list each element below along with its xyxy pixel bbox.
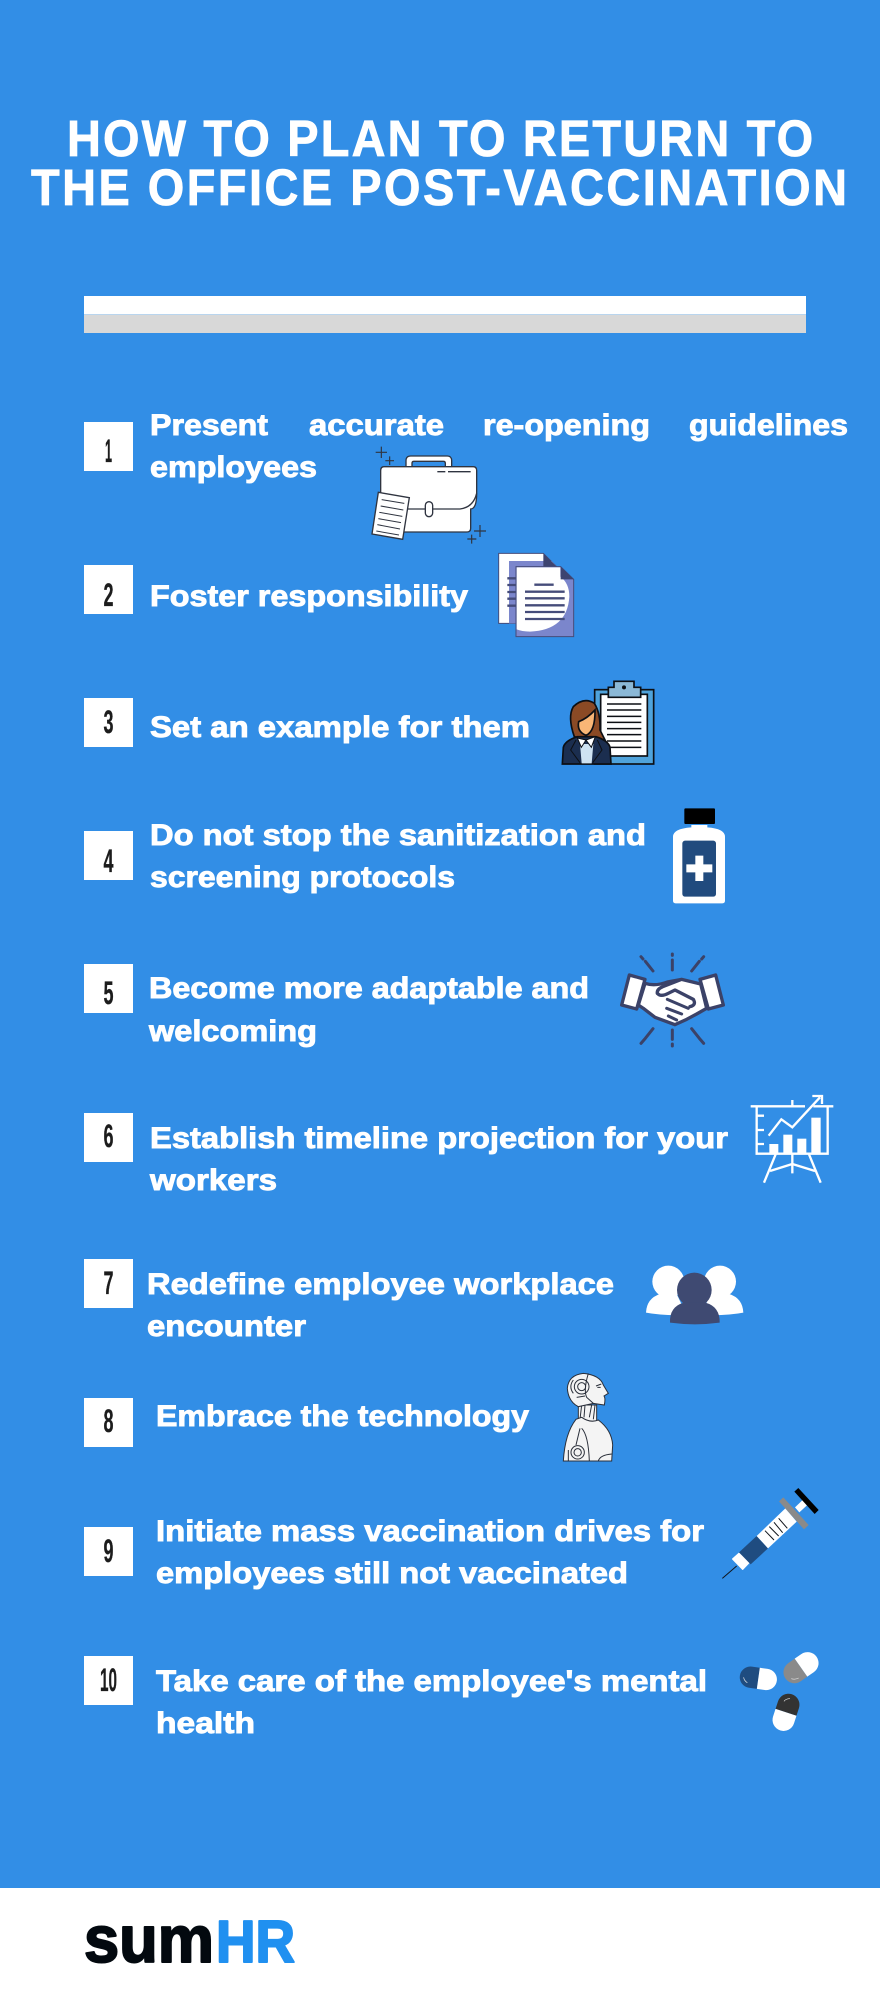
header divider bar <box>84 296 806 333</box>
item 10 <box>84 1656 707 1740</box>
icon: woman with clipboard <box>562 681 654 764</box>
item 1: Present <box>150 409 268 442</box>
title <box>31 111 847 216</box>
item 5: welcoming <box>148 1015 317 1048</box>
item 6: 6 <box>104 1118 114 1154</box>
item 2: Foster responsibility <box>150 580 469 613</box>
item 1: re-opening <box>483 409 650 442</box>
icon: pills <box>738 1648 823 1734</box>
item 1: guidelines <box>689 409 848 442</box>
item 4: 4 <box>104 843 114 879</box>
item 10: health <box>156 1707 255 1740</box>
item 7: 7 <box>104 1265 114 1301</box>
item 9 <box>84 1515 705 1590</box>
logo: sumHR: HR <box>216 1909 295 1975</box>
item 10: 10 <box>100 1662 117 1698</box>
title: THE OFFICE POST-VACCINATION <box>31 160 847 216</box>
item 3: Set an example for them <box>150 711 530 744</box>
item 3: 3 <box>104 704 114 740</box>
item 1: 1 <box>105 433 112 469</box>
item 9: Initiate mass vaccination drives for <box>156 1515 705 1548</box>
item 6: Establish timeline projection for your <box>150 1122 729 1155</box>
item 7: Redefine employee workplace <box>147 1268 614 1301</box>
icon: sanitizer bottle <box>673 808 725 903</box>
footer band <box>0 1888 880 2000</box>
item 4: screening protocols <box>150 861 455 894</box>
item 8: Embrace the technology <box>156 1400 530 1433</box>
item 7 <box>84 1259 614 1343</box>
icon: syringe <box>722 1488 819 1578</box>
item 2: 2 <box>104 577 114 613</box>
item 1: employees <box>150 451 317 484</box>
item 7: encounter <box>147 1310 307 1343</box>
item 2 <box>84 565 469 614</box>
logo: sumHR <box>84 1902 295 1976</box>
icon: robot <box>563 1373 613 1461</box>
item 4: Do not stop the sanitization and <box>150 819 646 852</box>
title: HOW TO PLAN TO RETURN TO <box>67 111 813 167</box>
item 9: employees still not vaccinated <box>156 1557 628 1590</box>
icon: people group <box>646 1266 743 1324</box>
item 5: 5 <box>104 975 114 1011</box>
item 8: 8 <box>104 1403 114 1439</box>
item 9: 9 <box>104 1533 114 1569</box>
icon: documents <box>499 553 574 637</box>
item 5: Become more adaptable and <box>149 972 589 1005</box>
item 1 <box>84 409 848 484</box>
icon: handshake <box>622 954 723 1046</box>
item 1: accurate <box>309 409 444 442</box>
item 4 <box>84 819 646 894</box>
icon: briefcase <box>372 447 486 544</box>
item 6: workers <box>149 1164 277 1197</box>
item 8 <box>84 1398 530 1447</box>
item 6 <box>84 1113 729 1197</box>
logo: sumHR: sum <box>84 1902 214 1976</box>
item 5 <box>84 964 589 1048</box>
item 10: Take care of the employee's mental <box>156 1665 707 1698</box>
item 3 <box>84 698 530 747</box>
icon: presentation chart <box>751 1096 833 1183</box>
